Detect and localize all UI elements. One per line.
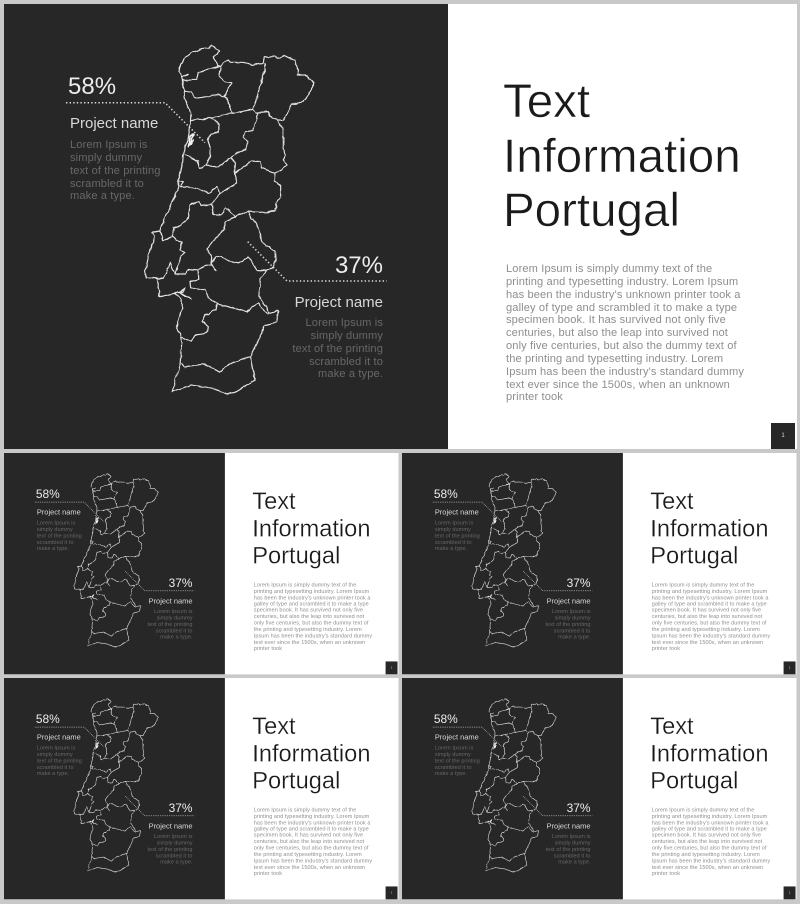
- callout name left: Project name: [70, 115, 158, 132]
- callout name right: Project name: [149, 822, 193, 831]
- heading: Text: [252, 713, 296, 740]
- page number: 1: [391, 891, 392, 894]
- map of Portugal with leader lines: [34, 698, 194, 872]
- body text: only five centuries, but also the dummy text of: [254, 620, 369, 626]
- callout text right: make a type.: [558, 634, 591, 640]
- callout: 37%: 37%: [169, 576, 193, 590]
- slide: main large: [4, 4, 797, 449]
- heading: [650, 713, 768, 794]
- map of Portugal with leader lines: [34, 473, 194, 648]
- callout text left: scrambled it to: [435, 539, 472, 545]
- callout text left: scrambled it to: [37, 539, 74, 545]
- body text: Lorem Ipsum is simply dummy text of the: [652, 582, 754, 588]
- slide: thumbnail bottom left: [4, 678, 399, 899]
- body text: the printing and typesetting industry. Lorem: [254, 627, 362, 633]
- body text: the printing and typesetting industry. Lorem: [254, 852, 362, 858]
- page number: 1: [781, 433, 785, 439]
- callout: 58%: 58%: [68, 73, 116, 100]
- callout name right: Project name: [149, 597, 193, 606]
- panel: dark map panel: [4, 678, 225, 899]
- callout text right: [147, 609, 193, 640]
- body text: text ever since the 1500s, when an unknown: [254, 864, 365, 870]
- body text: galley of type and scrambled it to make a type: [254, 601, 369, 607]
- body text: Lorem Ipsum is simply dummy text of the: [254, 807, 356, 813]
- page number: [386, 661, 398, 674]
- callout: 58%: 58%: [434, 487, 458, 501]
- callout text left: Lorem Ipsum is: [435, 520, 473, 526]
- body text: the printing and typesetting industry. Lorem: [652, 852, 760, 858]
- callout text left: make a type.: [435, 546, 467, 552]
- body text: text ever since the 1500s, when an unknown: [652, 864, 763, 870]
- callout text right: make a type.: [160, 859, 193, 865]
- body text: galley of type and scrambled it to make a type: [652, 826, 767, 832]
- callout text left: Lorem Ipsum is: [435, 745, 473, 751]
- body text: centuries, but also the leap into survived not: [652, 614, 762, 620]
- panel: dark map panel: [402, 678, 623, 899]
- heading: Information: [252, 740, 370, 767]
- body text: centuries, but also the leap into survived not: [254, 614, 364, 620]
- callout: 37%: 37%: [567, 801, 591, 815]
- page number: [784, 886, 796, 899]
- slide: thumbnail bottom right: [402, 678, 797, 899]
- callout text right: simply dummy: [157, 615, 193, 621]
- body text: has been the industry's unknown printer took a: [652, 595, 768, 601]
- callout text left: simply dummy: [37, 752, 73, 758]
- callout: 58%: 58%: [434, 712, 458, 726]
- callout text right: [147, 834, 193, 865]
- heading: Text: [650, 713, 694, 740]
- callout text right: Lorem Ipsum is: [154, 609, 193, 615]
- slide: thumbnail top left: [4, 453, 399, 674]
- page number: 1: [789, 891, 790, 894]
- body text: has been the industry's unknown printer took a: [506, 289, 741, 301]
- page number: 1: [391, 666, 392, 669]
- body text: Ipsum has been the industry's standard dummy: [254, 858, 372, 864]
- callout text left: simply dummy: [435, 527, 471, 533]
- body text: specimen book. It has survived not only five: [254, 832, 363, 838]
- body text: printing and typesetting industry. Lorem Ipsum: [652, 588, 767, 594]
- body text: specimen book. It has survived not only five: [254, 607, 363, 613]
- body text: Lorem Ipsum is simply dummy text of the: [652, 807, 754, 813]
- heading: Portugal: [252, 768, 340, 794]
- heading: Text: [252, 488, 296, 515]
- callout text left: make a type.: [37, 771, 69, 777]
- body text: [506, 263, 744, 403]
- body text: specimen book. It has survived not only five: [506, 314, 726, 326]
- callout text left: [70, 139, 161, 202]
- callout name left: Project name: [37, 508, 81, 517]
- heading: [252, 713, 370, 794]
- callout text left: scrambled it to: [435, 764, 472, 770]
- heading: [252, 488, 370, 569]
- callout text right: scrambled it to: [156, 853, 193, 859]
- body text: [254, 807, 372, 877]
- heading: Information: [252, 515, 370, 542]
- body text: the printing and typesetting industry. Lorem: [506, 353, 723, 365]
- callout text left: [37, 520, 82, 552]
- callout text left: [435, 520, 480, 552]
- body text: printer took: [652, 871, 680, 877]
- callout text right: text of the printing: [292, 343, 383, 355]
- heading: [650, 488, 768, 569]
- callout text left: make a type.: [37, 546, 69, 552]
- callout text right: text of the printing: [147, 621, 193, 627]
- callout text right: [545, 609, 591, 640]
- map of Portugal with leader lines: [66, 44, 387, 395]
- callout text right: Lorem Ipsum is: [552, 834, 591, 840]
- body text: galley of type and scrambled it to make a type: [652, 601, 767, 607]
- callout text left: text of the printing: [37, 758, 82, 764]
- callout name left: Project name: [37, 733, 81, 742]
- callout text right: simply dummy: [311, 330, 383, 342]
- body text: specimen book. It has survived not only five: [652, 607, 761, 613]
- panel: dark map panel: [4, 453, 225, 674]
- heading: Portugal: [650, 768, 738, 794]
- body text: [652, 807, 770, 877]
- callout text left: Lorem Ipsum is: [37, 745, 75, 751]
- callout text right: make a type.: [558, 859, 591, 865]
- body text: Ipsum has been the industry's standard dummy: [652, 858, 770, 864]
- body text: has been the industry's unknown printer took a: [254, 595, 370, 601]
- slide: thumbnail top right: [402, 453, 797, 674]
- callout: 37%: 37%: [169, 801, 193, 815]
- callout text left: simply dummy: [37, 527, 73, 533]
- callout name right: Project name: [295, 294, 383, 311]
- heading: Text: [503, 75, 590, 128]
- callout name right: Project name: [547, 597, 591, 606]
- body text: Ipsum has been the industry's standard dummy: [254, 633, 372, 639]
- callout text right: Lorem Ipsum is: [154, 834, 193, 840]
- body text: only five centuries, but also the dummy text of: [506, 340, 737, 352]
- callout text right: simply dummy: [555, 840, 591, 846]
- page number: [784, 661, 796, 674]
- heading: Text: [650, 488, 694, 515]
- body text: [254, 582, 372, 652]
- callout text left: text of the printing: [70, 165, 161, 177]
- heading: Portugal: [503, 184, 680, 237]
- heading: [503, 75, 741, 237]
- callout: 58%: 58%: [36, 712, 60, 726]
- map of Portugal with leader lines: [432, 473, 592, 648]
- body text: printing and typesetting industry. Lorem Ipsum: [652, 813, 767, 819]
- callout text right: [545, 834, 591, 865]
- body text: has been the industry's unknown printer took a: [652, 820, 768, 826]
- page number: [771, 423, 795, 449]
- body text: text ever since the 1500s, when an unknown: [652, 639, 763, 645]
- callout text left: Lorem Ipsum is: [37, 520, 75, 526]
- body text: Lorem Ipsum is simply dummy text of the: [254, 582, 356, 588]
- heading: Portugal: [650, 543, 738, 569]
- body text: galley of type and scrambled it to make a type: [506, 302, 737, 314]
- body text: [652, 582, 770, 652]
- callout text left: scrambled it to: [70, 178, 144, 190]
- map outline: [146, 46, 314, 393]
- body text: centuries, but also the leap into survived not: [652, 839, 762, 845]
- body text: only five centuries, but also the dummy text of: [254, 845, 369, 851]
- body text: only five centuries, but also the dummy text of: [652, 845, 767, 851]
- panel: dark map panel: [4, 4, 448, 449]
- body text: printing and typesetting industry. Lorem Ipsum: [254, 588, 369, 594]
- callout name right: Project name: [547, 822, 591, 831]
- callout text right: Lorem Ipsum is: [305, 317, 383, 329]
- callout text right: Lorem Ipsum is: [552, 609, 591, 615]
- heading: Information: [650, 515, 768, 542]
- body text: printing and typesetting industry. Lorem Ipsum: [506, 276, 738, 288]
- callout text left: Lorem Ipsum is: [70, 139, 148, 151]
- callout text left: text of the printing: [435, 533, 480, 539]
- body text: specimen book. It has survived not only five: [652, 832, 761, 838]
- callout text right: make a type.: [318, 368, 383, 380]
- callout text right: make a type.: [160, 634, 193, 640]
- callout text left: simply dummy: [70, 152, 142, 164]
- panel: dark map panel: [402, 453, 623, 674]
- callout text right: scrambled it to: [554, 628, 591, 634]
- page number: [386, 886, 398, 899]
- callout text right: simply dummy: [157, 840, 193, 846]
- callout text right: simply dummy: [555, 615, 591, 621]
- body text: Lorem Ipsum is simply dummy text of the: [506, 263, 712, 275]
- callout: 58%: 58%: [36, 487, 60, 501]
- heading: Information: [503, 130, 741, 183]
- callout text left: make a type.: [70, 190, 135, 202]
- body text: only five centuries, but also the dummy text of: [652, 620, 767, 626]
- callout text left: scrambled it to: [37, 764, 74, 770]
- callout text left: simply dummy: [435, 752, 471, 758]
- callout: 37%: 37%: [567, 576, 591, 590]
- body text: Ipsum has been the industry's standard dummy: [506, 366, 744, 378]
- body text: has been the industry's unknown printer took a: [254, 820, 370, 826]
- callout text right: [292, 317, 383, 380]
- callout name left: Project name: [435, 508, 479, 517]
- body text: Ipsum has been the industry's standard dummy: [652, 633, 770, 639]
- callout text right: text of the printing: [545, 621, 591, 627]
- callout text right: text of the printing: [545, 846, 591, 852]
- page number: 1: [789, 666, 790, 669]
- body text: printer took: [652, 646, 680, 652]
- body text: centuries, but also the leap into survived not: [506, 327, 728, 339]
- heading: Portugal: [252, 543, 340, 569]
- callout text left: [435, 745, 480, 777]
- callout text left: [37, 745, 82, 777]
- callout: 37%: 37%: [335, 252, 383, 279]
- body text: text ever since the 1500s, when an unknown: [506, 379, 730, 391]
- body text: centuries, but also the leap into survived not: [254, 839, 364, 845]
- body text: printer took: [506, 391, 563, 403]
- callout text left: text of the printing: [435, 758, 480, 764]
- body text: printer took: [254, 871, 282, 877]
- callout text right: scrambled it to: [554, 853, 591, 859]
- callout text right: scrambled it to: [309, 356, 383, 368]
- body text: printer took: [254, 646, 282, 652]
- body text: the printing and typesetting industry. Lorem: [652, 627, 760, 633]
- body text: text ever since the 1500s, when an unknown: [254, 639, 365, 645]
- callout text left: text of the printing: [37, 533, 82, 539]
- body text: printing and typesetting industry. Lorem Ipsum: [254, 813, 369, 819]
- callout text right: text of the printing: [147, 846, 193, 852]
- leader lines: [66, 103, 387, 281]
- heading: Information: [650, 740, 768, 767]
- map of Portugal with leader lines: [432, 698, 592, 872]
- callout text left: make a type.: [435, 771, 467, 777]
- callout text right: scrambled it to: [156, 628, 193, 634]
- callout name left: Project name: [435, 733, 479, 742]
- body text: galley of type and scrambled it to make a type: [254, 826, 369, 832]
